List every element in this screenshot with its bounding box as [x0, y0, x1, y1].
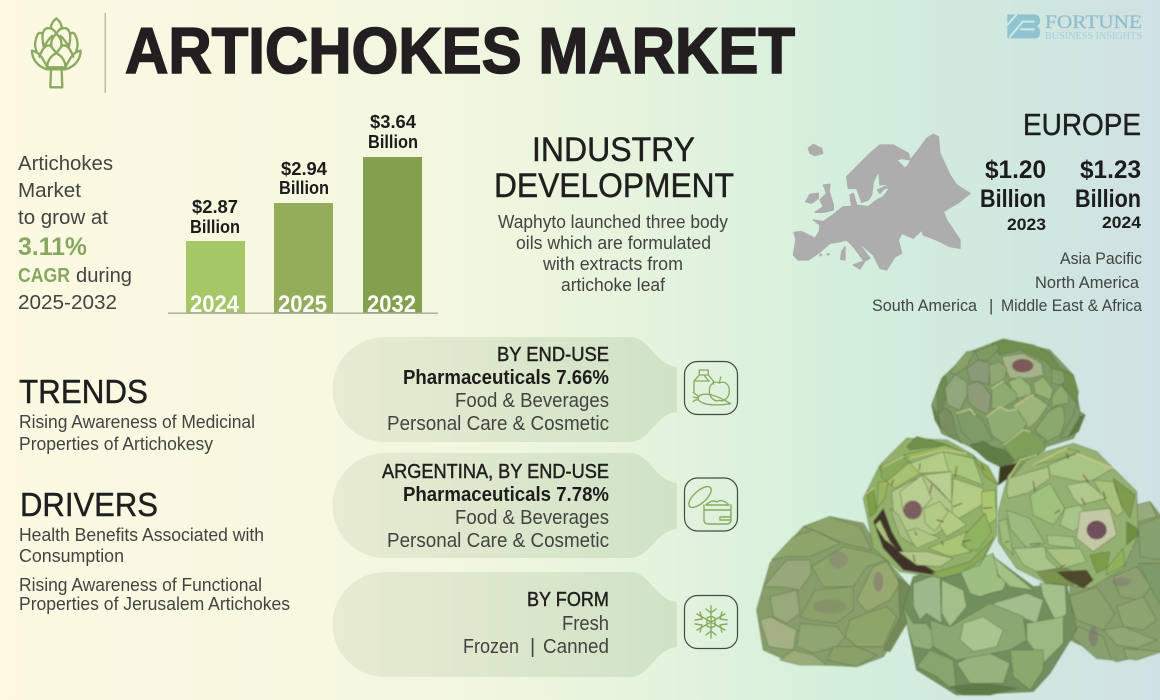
industry development: INDUSTRY	[532, 131, 695, 169]
panel: by form: BY FORM	[527, 589, 609, 611]
bar chart: Billion	[279, 178, 329, 198]
icon: cosmetic jar	[684, 478, 738, 531]
panel: argentina by end-use: Food & Beverages	[455, 507, 609, 529]
industry development: DEVELOPMENT	[494, 167, 734, 205]
CAGR text block: Artichokes	[18, 153, 113, 175]
CAGR text block: CAGR	[18, 265, 70, 287]
artichoke: bottom centre	[903, 553, 1077, 695]
panel: argentina by end-use: Pharmaceuticals 7.78%	[403, 484, 609, 506]
artichoke: bottom right	[1068, 502, 1160, 662]
other regions: |	[989, 297, 993, 315]
divider	[104, 13, 106, 93]
other regions	[872, 250, 1143, 315]
europe stats: $1.20	[985, 156, 1046, 184]
europe stats	[980, 107, 1142, 234]
panel: argentina by end-use	[332, 453, 677, 558]
artichoke: top	[932, 339, 1085, 485]
bar chart: 2025	[278, 291, 327, 318]
trends: Rising Awareness of Medicinal	[19, 412, 255, 432]
bar chart: $3.64	[370, 112, 416, 132]
CAGR text block: to grow at	[18, 207, 108, 229]
panel: by end-use: Personal Care & Cosmetic	[387, 413, 609, 435]
other regions: Middle East & Africa	[1001, 297, 1143, 315]
panel: by end-use: BY END-USE	[497, 344, 609, 366]
other regions: South America	[872, 297, 978, 315]
drivers: DRIVERS	[20, 486, 158, 523]
industry development: Waphyto launched three body	[498, 212, 728, 232]
europe stats: Billion	[980, 185, 1046, 213]
panel: argentina by end-use: Personal Care & Cosmetic	[387, 530, 609, 552]
CAGR text block	[18, 153, 132, 314]
bar chart: $2.87	[192, 197, 238, 217]
logo: Fortune Business Insights: BUSINESS INSIGHTS	[1045, 31, 1142, 42]
map: Europe	[793, 134, 970, 270]
drivers: Properties of Jerusalem Artichokes	[19, 594, 290, 614]
europe stats: EUROPE	[1023, 107, 1141, 142]
europe stats: 2023	[1007, 215, 1046, 234]
bar chart: Billion	[190, 217, 240, 237]
drivers: Health Benefits Associated with	[19, 525, 264, 545]
europe stats: $1.23	[1080, 156, 1141, 184]
panel: by form: |	[530, 636, 535, 658]
title: ARTICHOKES MARKET	[125, 14, 795, 87]
artichoke: bottom left	[757, 517, 910, 667]
drivers: Rising Awareness of Functional	[19, 575, 262, 595]
CAGR text block: Market	[18, 180, 81, 202]
other regions: Asia Pacific	[1060, 250, 1142, 268]
photo: artichokes	[757, 339, 1160, 695]
europe stats: 2024	[1102, 213, 1142, 232]
icon: snowflake	[684, 596, 738, 648]
panel: by end-use: Food & Beverages	[455, 390, 609, 412]
panel: by form: Fresh	[562, 613, 609, 635]
bar chart: 2032	[367, 291, 416, 318]
CAGR text block: during	[76, 265, 132, 287]
artichoke: middle right	[998, 443, 1138, 588]
drivers: Consumption	[19, 546, 124, 566]
logo: Fortune Business Insights: FORTUNE	[1045, 12, 1142, 33]
industry development	[494, 131, 734, 295]
panel: argentina by end-use: ARGENTINA, BY END-USE	[382, 461, 609, 483]
panel: by end-use: Pharmaceuticals 7.66%	[403, 367, 609, 389]
panel: by form	[332, 572, 677, 677]
industry development: artichoke leaf	[561, 275, 666, 295]
icon: artichoke logo	[32, 18, 81, 87]
trends: TRENDS	[19, 373, 148, 410]
icon: food and beverages	[684, 362, 738, 414]
bar chart: $2.94	[281, 159, 327, 179]
europe stats: Billion	[1075, 185, 1141, 213]
industry development: with extracts from	[542, 254, 683, 274]
drivers	[19, 486, 290, 614]
bar chart	[168, 112, 438, 318]
panel: by form: Canned	[543, 636, 609, 658]
logo: Fortune Business Insights	[1007, 12, 1142, 42]
CAGR text block: 3.11%	[18, 233, 87, 261]
CAGR text block: 2025-2032	[18, 292, 117, 314]
industry development: oils which are formulated	[516, 233, 711, 253]
panel: by form: Frozen	[463, 636, 519, 658]
bar chart: 2024	[190, 291, 240, 318]
artichoke: middle left	[863, 437, 998, 578]
trends: Properties of Artichokesy	[19, 434, 213, 454]
panel: by end-use	[332, 337, 677, 442]
trends	[19, 373, 255, 454]
other regions: North America	[1035, 274, 1140, 292]
bar chart: Billion	[368, 132, 418, 152]
